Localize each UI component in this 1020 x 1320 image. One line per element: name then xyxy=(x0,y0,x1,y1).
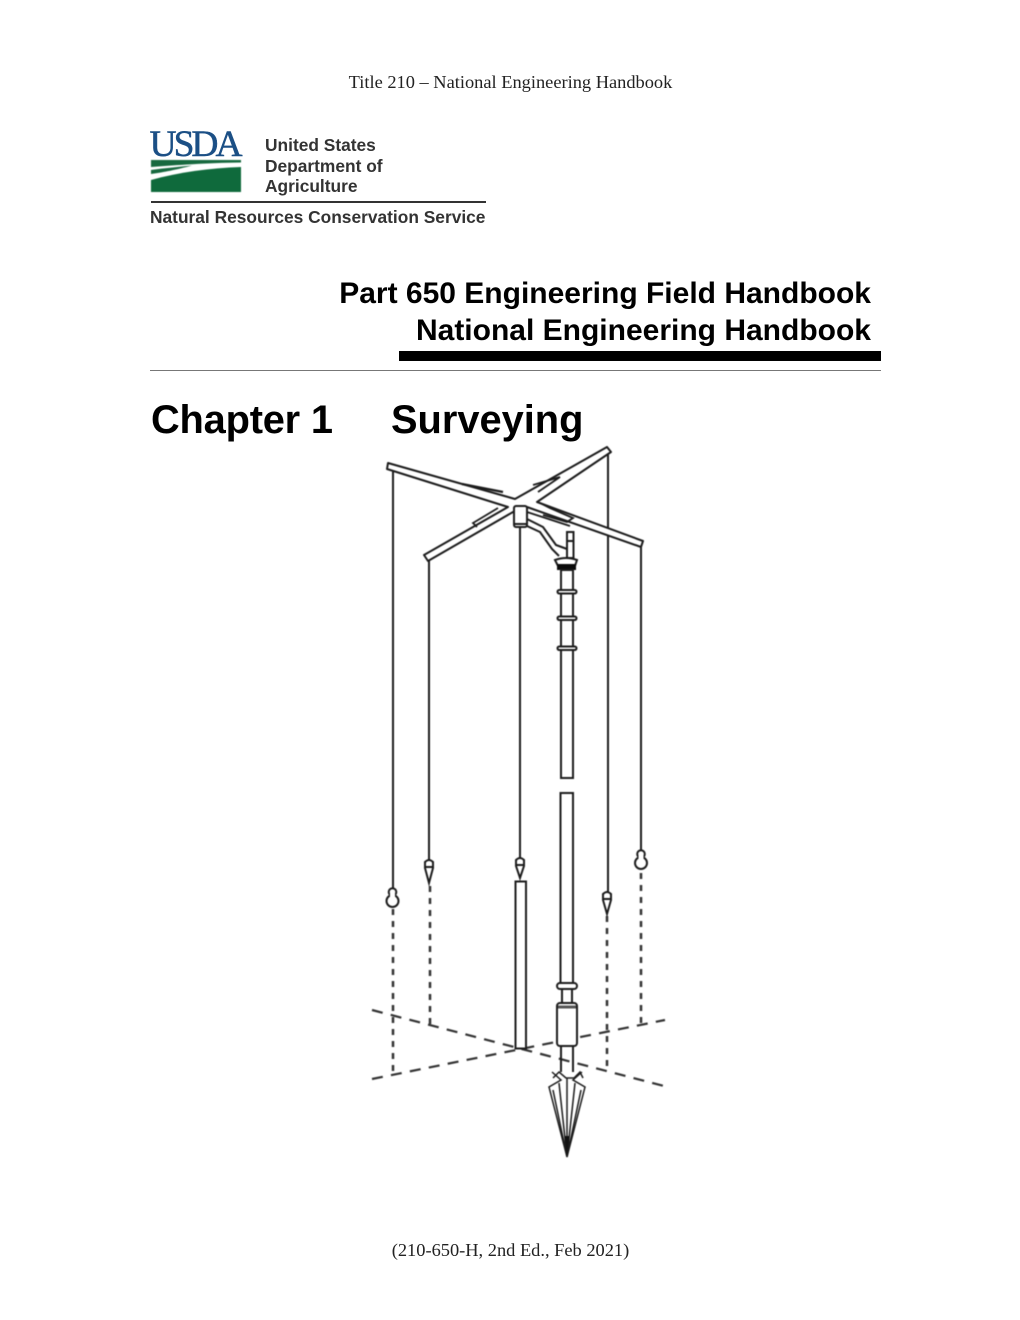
staff upper stub xyxy=(567,532,574,558)
plumb bob pointed C xyxy=(603,892,611,914)
staff rings xyxy=(558,590,576,650)
plumb bob pointed A xyxy=(425,860,433,883)
USDA wordmark: USDA xyxy=(150,124,240,165)
target rod xyxy=(516,882,526,1048)
running header: Title 210 – National Engineering Handbook xyxy=(349,72,672,92)
staff upper section xyxy=(561,570,573,778)
ground dashed axes xyxy=(372,1010,665,1086)
document number footer: (210-650-H, 2nd Ed., Feb 2021) xyxy=(392,1240,629,1260)
plumb bob pointed B xyxy=(516,858,524,878)
chapter title: Surveying xyxy=(391,398,583,442)
plumb strings xyxy=(393,451,641,893)
handbook title: Part 650 Engineering Field Handbook xyxy=(339,277,871,310)
USDA NRCS logo xyxy=(150,124,486,227)
arm braces xyxy=(462,477,573,527)
staff lower ring xyxy=(557,983,577,989)
agency name line 2: Department of xyxy=(265,156,383,176)
plumb bob right rounded xyxy=(635,850,647,869)
handbook title: National Engineering Handbook xyxy=(416,314,871,347)
agency name line 3: Agriculture xyxy=(265,176,358,196)
plumb line drop dashes xyxy=(393,873,641,1075)
agency name: United States xyxy=(265,135,376,155)
staff spike point xyxy=(549,1072,585,1157)
handbook title xyxy=(339,277,871,347)
staff neck xyxy=(562,989,572,1003)
thin rule xyxy=(150,370,881,371)
thick title bar xyxy=(399,351,881,361)
staff shaft below sleeve xyxy=(561,1046,573,1072)
staff sleeve xyxy=(557,1003,577,1046)
staff lower section xyxy=(560,793,573,984)
top socket xyxy=(514,506,527,527)
plumb bob left rounded xyxy=(386,888,398,907)
offset bracket xyxy=(527,519,567,556)
logo rule xyxy=(151,201,486,203)
chapter number: Chapter 1 xyxy=(151,398,333,442)
staff collar xyxy=(555,558,577,566)
service name: Natural Resources Conservation Service xyxy=(150,207,485,227)
logo green field emblem xyxy=(150,159,242,193)
cross arms xyxy=(387,447,643,561)
